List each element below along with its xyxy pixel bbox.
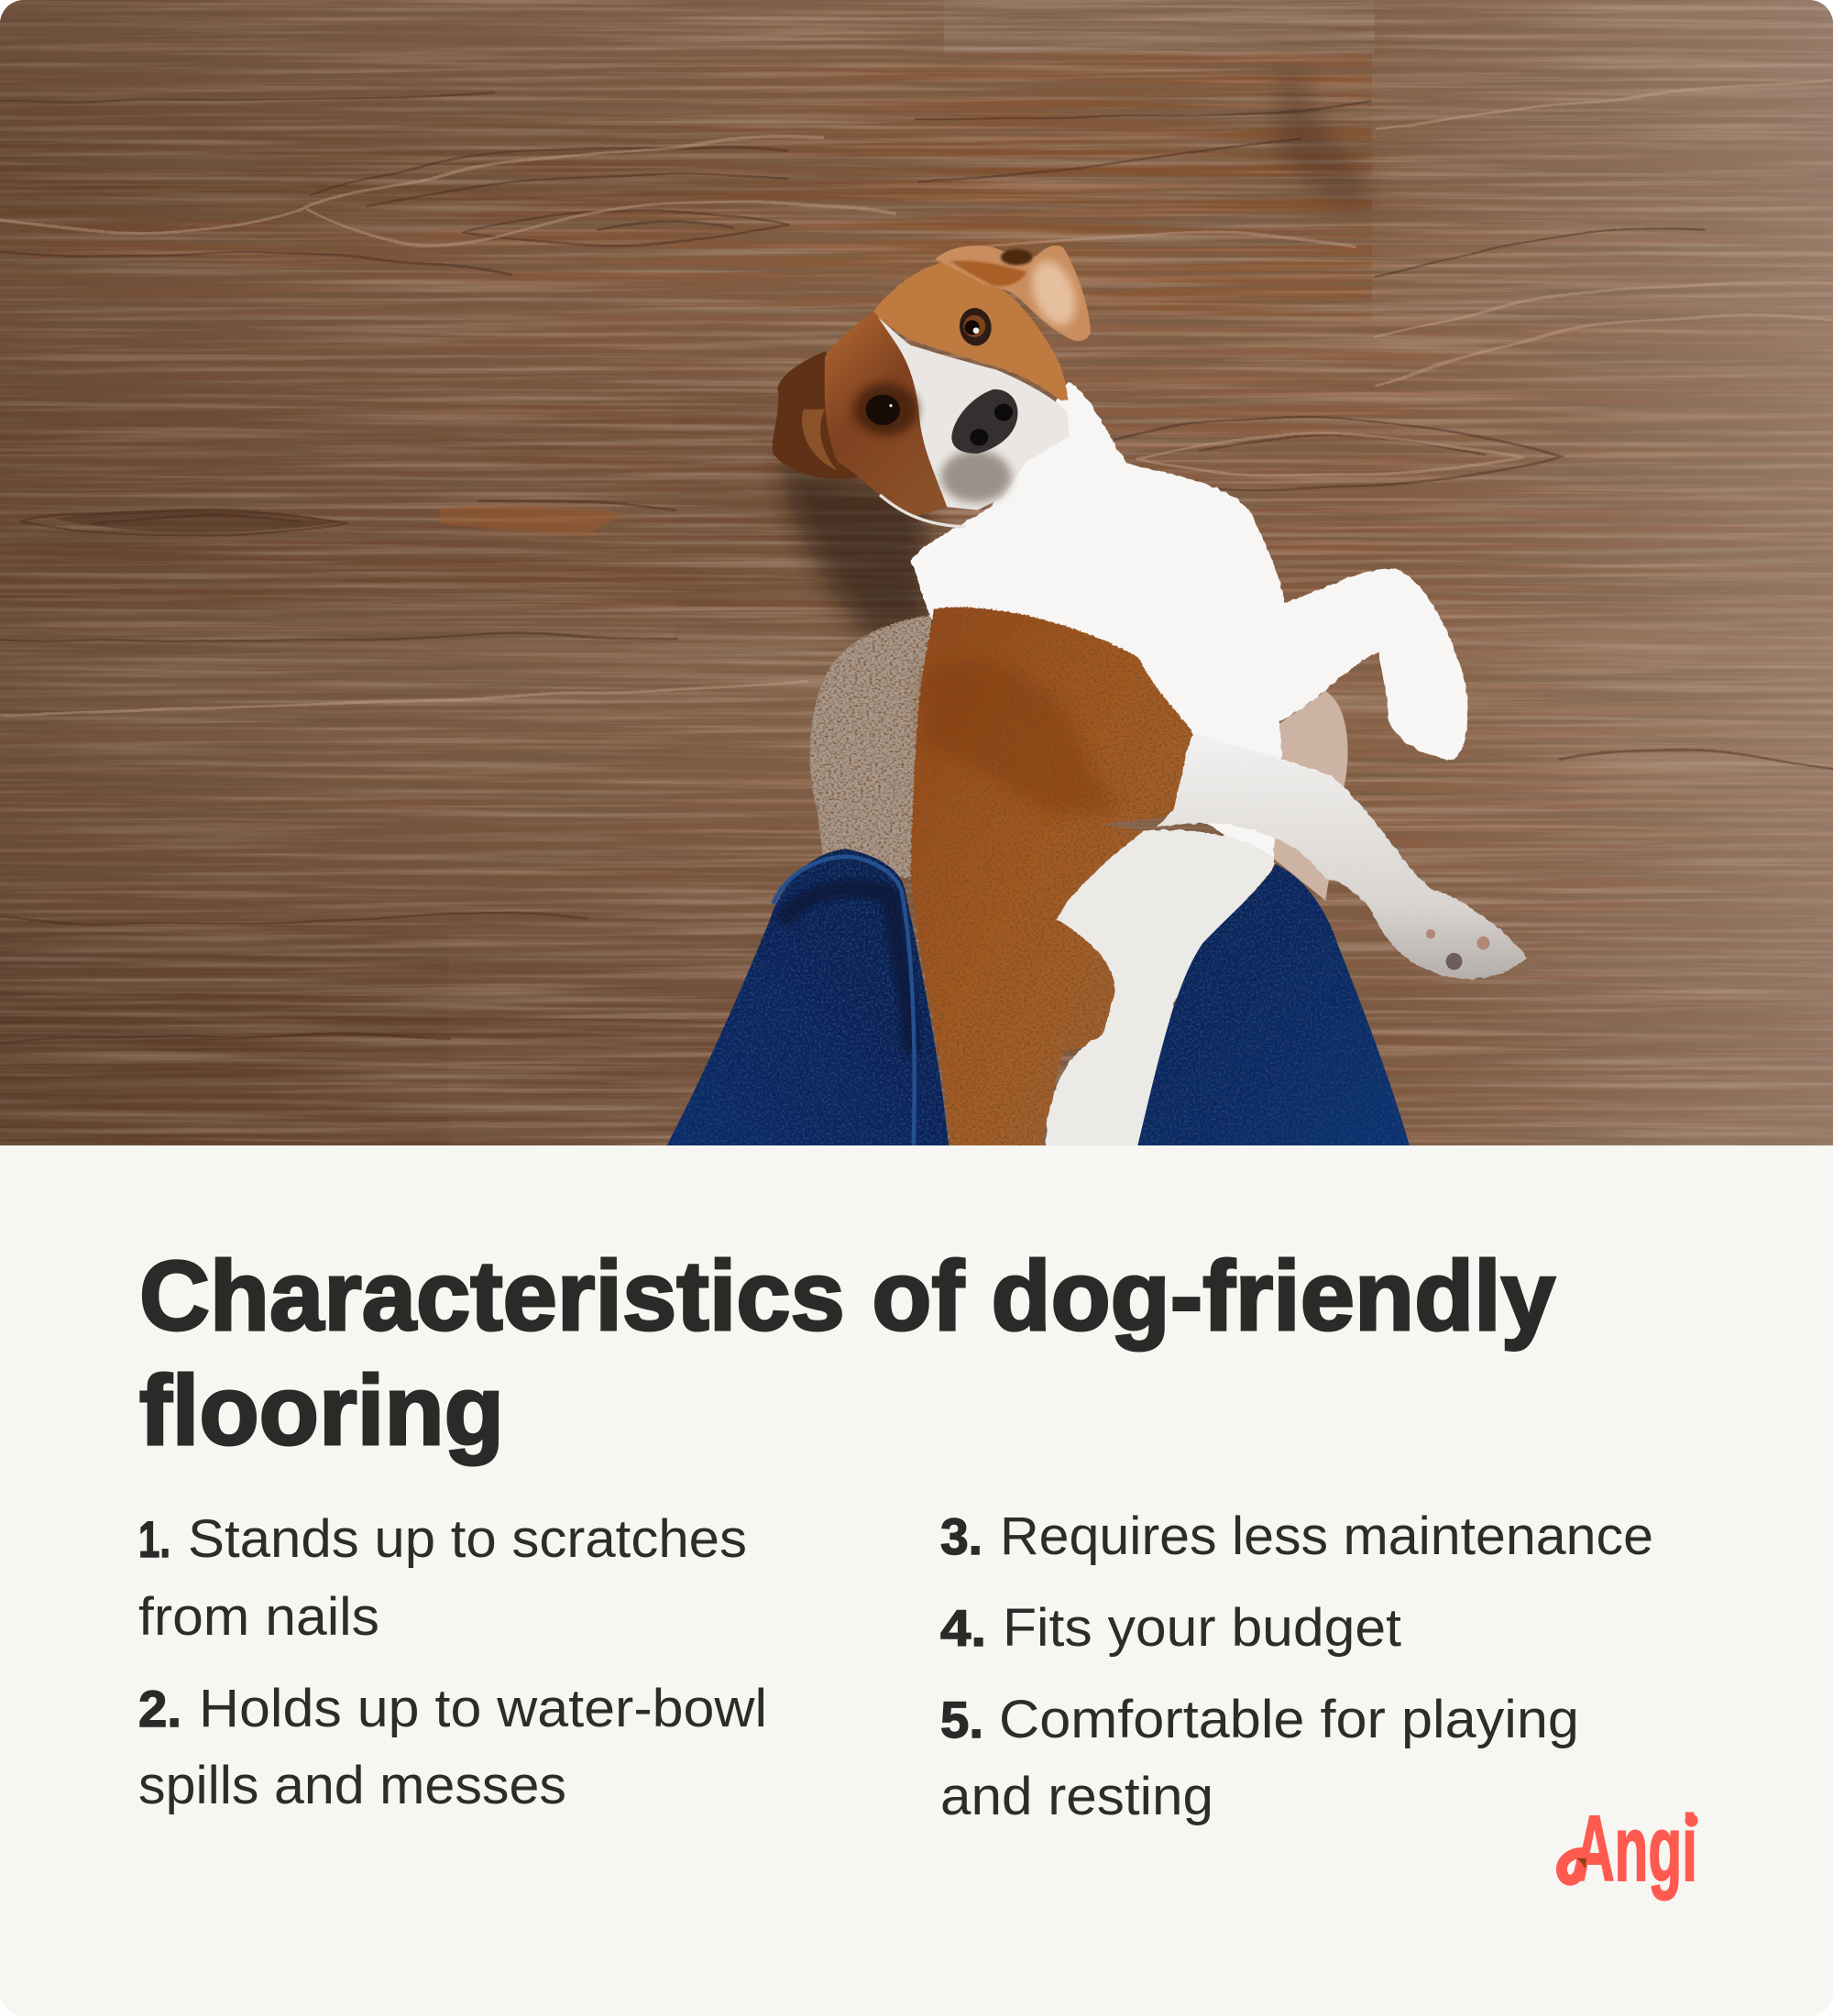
dog head: top brown side bbox=[873, 263, 1068, 400]
list item 3: Requires less maintenance bbox=[1000, 1507, 1653, 1566]
dog head: left brown side bbox=[825, 312, 947, 516]
dog and legs bbox=[662, 381, 1527, 1155]
dog left ear bbox=[773, 351, 859, 479]
dog eye: lower bbox=[866, 395, 900, 425]
dog eye: upper bbox=[957, 306, 993, 348]
dog nose bbox=[951, 389, 1017, 454]
logo: Angi: Angi bbox=[1575, 1798, 1697, 1901]
dog body: brown patch bbox=[910, 607, 1194, 1155]
shading on brown patch bbox=[922, 658, 1121, 816]
dog body: white chest and hind leg bbox=[910, 381, 1467, 871]
list item 3: 3. bbox=[940, 1507, 982, 1565]
jeans: right leg bbox=[1136, 864, 1412, 1155]
paw marks bbox=[1426, 929, 1489, 970]
list item 4: Fits your budget bbox=[1003, 1598, 1401, 1658]
wood floor bbox=[0, 0, 1833, 1145]
list item 2: spills and messes bbox=[138, 1756, 566, 1815]
list item 1 bbox=[138, 1509, 747, 1647]
ear hollow bbox=[1001, 249, 1033, 265]
list item 1: Stands up to scratches bbox=[188, 1509, 747, 1569]
list item 2: 2. bbox=[138, 1680, 181, 1737]
ear fold shading bbox=[950, 261, 1026, 286]
list item 2 bbox=[138, 1679, 767, 1815]
dog muzzle shading bbox=[941, 451, 1011, 502]
list item 4: 4. bbox=[940, 1599, 986, 1657]
list item 5 bbox=[940, 1690, 1579, 1826]
panel: text background bbox=[0, 1145, 1833, 2016]
list item 1: 1. bbox=[138, 1510, 170, 1568]
dog shadow bbox=[779, 458, 935, 641]
dog belly: white patch bbox=[1045, 830, 1274, 1155]
jeans: left leg bbox=[662, 849, 949, 1155]
dog front leg bbox=[1156, 733, 1527, 979]
heading: Characteristics of dog-friendly bbox=[139, 1240, 1555, 1351]
dog muzzle: white bbox=[878, 318, 1070, 510]
sock: left foot bbox=[810, 615, 934, 880]
list item 5: and resting bbox=[940, 1767, 1213, 1826]
heading bbox=[139, 1240, 1555, 1465]
ear fold bbox=[802, 410, 837, 470]
photo: dog on wood floor bbox=[0, 0, 1833, 1155]
dark eye patch bbox=[854, 383, 918, 435]
list item 5: 5. bbox=[940, 1691, 983, 1748]
heading: flooring bbox=[139, 1354, 504, 1465]
sock: right foot bbox=[1273, 691, 1348, 901]
dog collar line bbox=[880, 495, 965, 527]
list item 5: Comfortable for playing bbox=[999, 1690, 1579, 1749]
list item 2: Holds up to water-bowl bbox=[199, 1679, 767, 1738]
list item 1: from nails bbox=[138, 1587, 379, 1647]
dog right ear bbox=[935, 246, 1091, 341]
logo: Angi bbox=[1562, 1798, 1698, 1901]
dog head bbox=[773, 246, 1091, 527]
ear highlight bbox=[1024, 255, 1084, 332]
